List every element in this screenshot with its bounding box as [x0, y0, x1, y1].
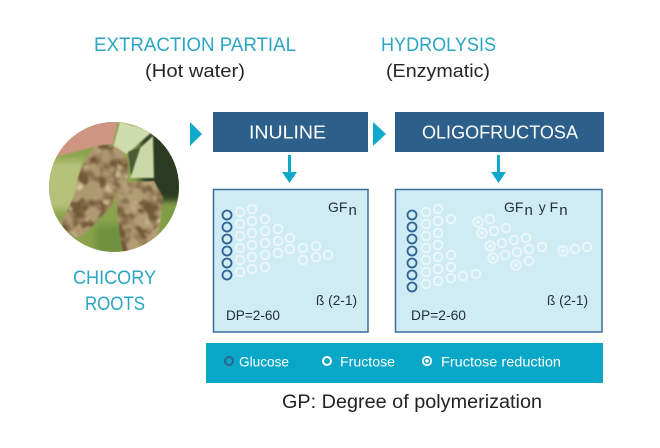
legend item: fructose: Fructose	[340, 354, 395, 370]
label: GFn: GF	[328, 199, 347, 215]
panel: inuline structure	[214, 190, 368, 332]
heading: extraction partial	[94, 35, 296, 81]
label: chicory roots: ROOTS	[85, 294, 145, 315]
arrow: inuline down	[282, 155, 297, 183]
heading: extraction partial: EXTRACTION PARTIAL	[94, 35, 296, 56]
label: GFn y Fn: GF	[504, 199, 523, 215]
footnote: GP: Degree of polymerization	[282, 392, 542, 413]
label: chicory roots: CHICORY	[73, 268, 156, 289]
fructose chains	[236, 205, 332, 276]
heading: hydrolysis: (Enzymatic)	[386, 61, 490, 81]
box: inuline: INULINE	[249, 122, 326, 142]
label: GFn y Fn: n	[524, 202, 533, 219]
box: oligofructosa: OLIGOFRUCTOSA	[422, 122, 578, 142]
fructose chains	[422, 205, 480, 288]
label: DP range: DP=2-60	[411, 307, 466, 323]
heading: hydrolysis: HYDROLYSIS	[381, 35, 496, 56]
box: inuline	[213, 112, 368, 152]
box: oligofructosa	[395, 112, 604, 152]
arrow: to inuline	[190, 122, 202, 146]
legend item: fructose reduction: Fructose reduction	[441, 354, 561, 370]
photo: chicory roots	[49, 122, 179, 252]
label: DP range: DP=2-60	[226, 307, 280, 323]
reduced fructose chains	[473, 215, 591, 270]
heading: hydrolysis	[381, 35, 496, 81]
label: GFn y Fn: y F	[539, 199, 558, 215]
label: GFn y Fn: n	[559, 202, 568, 219]
glucose chain	[408, 210, 416, 292]
arrow: oligofructosa down	[491, 155, 506, 183]
legend item: glucose: Glucose	[239, 354, 289, 370]
label: GFn: n	[348, 202, 357, 219]
heading: extraction partial: (Hot water)	[145, 61, 245, 81]
panel: oligofructosa structure	[396, 190, 602, 332]
arrow: to oligofructosa	[373, 122, 386, 146]
label: beta linkage: ß (2-1)	[316, 292, 357, 308]
legend	[206, 343, 603, 383]
label: beta linkage: ß (2-1)	[547, 292, 588, 308]
glucose chain	[222, 210, 232, 280]
label: chicory roots	[73, 268, 156, 315]
